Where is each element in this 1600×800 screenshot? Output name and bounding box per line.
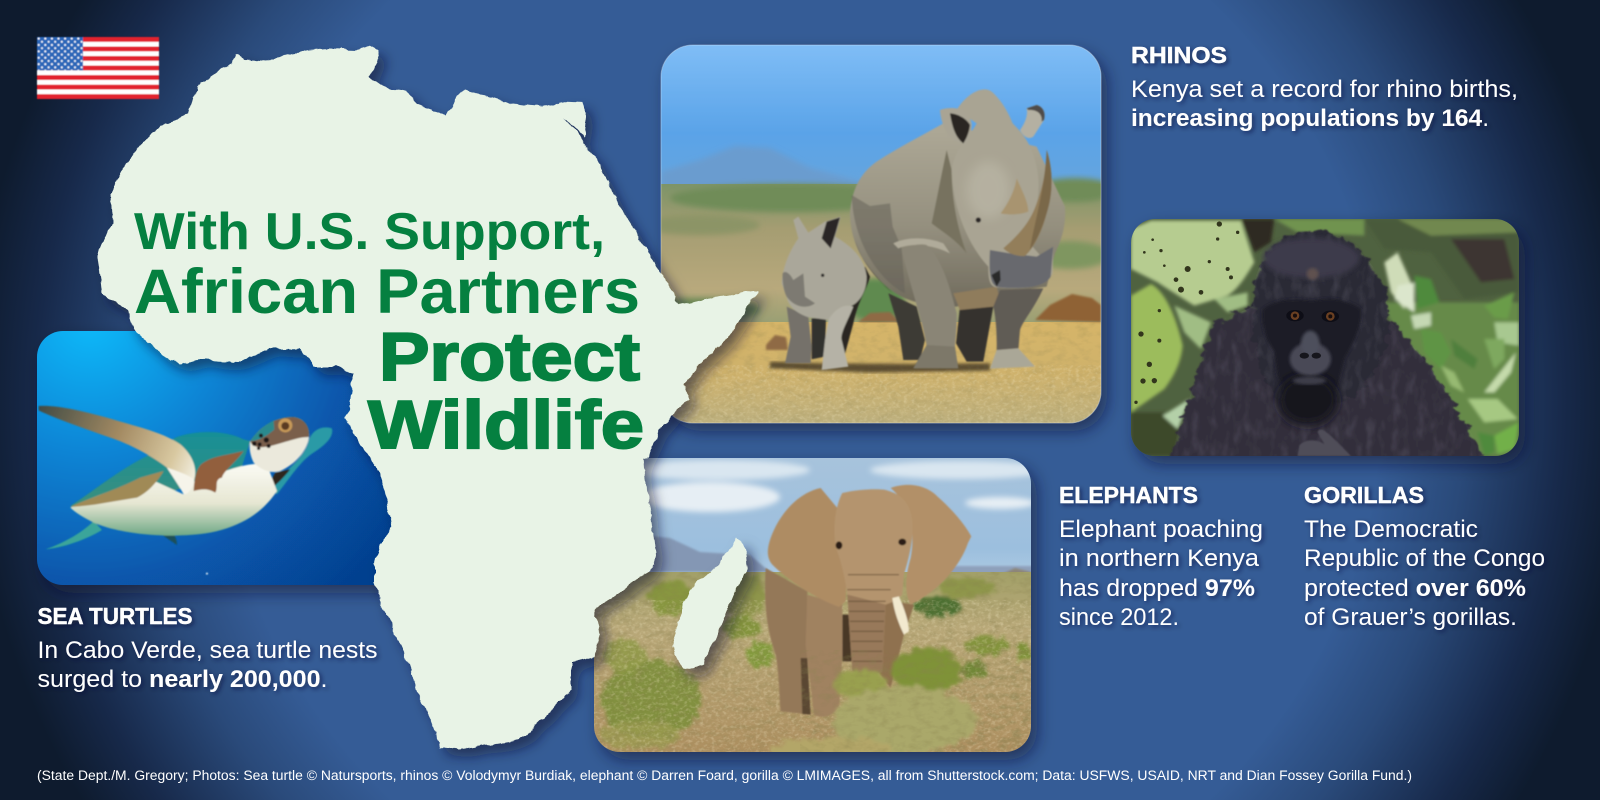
title: Protect (379, 319, 640, 395)
icon: muzzle (990, 247, 1053, 288)
icon: elephant head (834, 489, 913, 676)
icon: big spotted leaf (1131, 221, 1254, 306)
photo: gorilla (1131, 219, 1519, 470)
title: With U.S. Support, (134, 203, 605, 261)
photo: elephant (594, 458, 1050, 762)
icon: elephant (765, 485, 971, 717)
title (134, 203, 644, 463)
text: gorillas: GORILLAS (1304, 482, 1424, 508)
text: elephants: since 2012. (1059, 604, 1179, 631)
icon: turtle neck patch (194, 451, 244, 493)
icon: gorilla face (1262, 298, 1363, 392)
icon: gorilla hand (1298, 430, 1351, 456)
text: rhinos: increasing populations by 164 . (1131, 105, 1489, 132)
icon: main horn (1003, 172, 1052, 257)
icon: turtle rear flipper (45, 521, 102, 549)
text: gorillas: The Democratic (1304, 516, 1478, 543)
icon: head (952, 89, 1053, 288)
icon: gorilla (1170, 228, 1484, 456)
icon: elephant left ear (768, 488, 846, 607)
icon: gorilla eyes (1286, 310, 1304, 321)
text: elephants: Elephant poaching (1059, 516, 1263, 543)
icon: US flag (37, 37, 159, 99)
text: sea turtles: surged to nearly 200,000 . (38, 666, 328, 693)
icon: dirt mound (1035, 294, 1101, 322)
icon: baby rhino (782, 217, 870, 370)
title: African Partners (134, 257, 640, 327)
icon: lower left leaf (1131, 284, 1183, 412)
text: sea turtles: SEA TURTLES (38, 603, 192, 629)
icon: bushes (600, 573, 1032, 749)
text: sea turtles (38, 603, 377, 693)
icon: ground shadow (770, 362, 990, 373)
icon: gorilla nose and mouth (1290, 342, 1331, 376)
icon: front right leg (993, 288, 1043, 351)
icon: turtle body (70, 464, 277, 536)
text: gorillas: of Grauer’s gorillas. (1304, 604, 1517, 631)
text: gorillas: protected over 60% (1304, 575, 1526, 602)
icon: clouds (630, 460, 1050, 512)
icon: small horn (1001, 178, 1028, 214)
text: elephants (1059, 482, 1263, 631)
icon: turtle far flipper (270, 427, 332, 494)
map: Africa silhouette (97, 47, 758, 750)
title: Wildlife (368, 387, 644, 463)
text: rhinos (1131, 42, 1518, 132)
map: Madagascar (672, 536, 747, 669)
icon: turtle eye (278, 418, 292, 432)
text: elephants: has dropped 97% (1059, 575, 1255, 602)
icon: adult rhino (850, 89, 1065, 369)
text: rhinos: Kenya set a record for rhino births, (1131, 76, 1518, 103)
photo: rhinos (640, 45, 1115, 423)
text: elephants: ELEPHANTS (1059, 482, 1198, 508)
icon: turtle small fin (163, 535, 177, 545)
icon: right ear (1020, 105, 1045, 138)
icon: chest (953, 287, 1000, 310)
icon: front left leg (907, 244, 958, 348)
icon: left ear (939, 107, 972, 131)
icon: elephant right ear (891, 485, 971, 605)
text: elephants: in northern Kenya (1059, 545, 1260, 572)
icon: light leaves (1384, 252, 1411, 309)
text: gorillas: Republic of the Congo (1304, 545, 1545, 572)
text: sea turtles: In Cabo Verde, sea turtle nests (38, 637, 377, 664)
icon: turtle shell (70, 432, 250, 511)
icon: foreground bushes (770, 647, 977, 762)
text: rhinos: RHINOS (1131, 42, 1227, 68)
photo: sea turtle (37, 331, 407, 585)
icon: turtle head (250, 417, 309, 472)
icon: right foliage background (1371, 222, 1520, 296)
icon: elephant tusk (892, 596, 909, 635)
icon: turtle front flipper (39, 406, 195, 487)
credits: (State Dept./M. Gregory; Photos: Sea turtle © Natursports, rhinos © Volodymyr Burdiak, elephant © Darren Foard, gorilla © LMIMAGES, all from Shutterstock.com; Data: USFWS, USAID, NRT and Dian Fossey Gorilla Fund.) (37, 768, 1412, 783)
text: gorillas (1304, 482, 1545, 631)
